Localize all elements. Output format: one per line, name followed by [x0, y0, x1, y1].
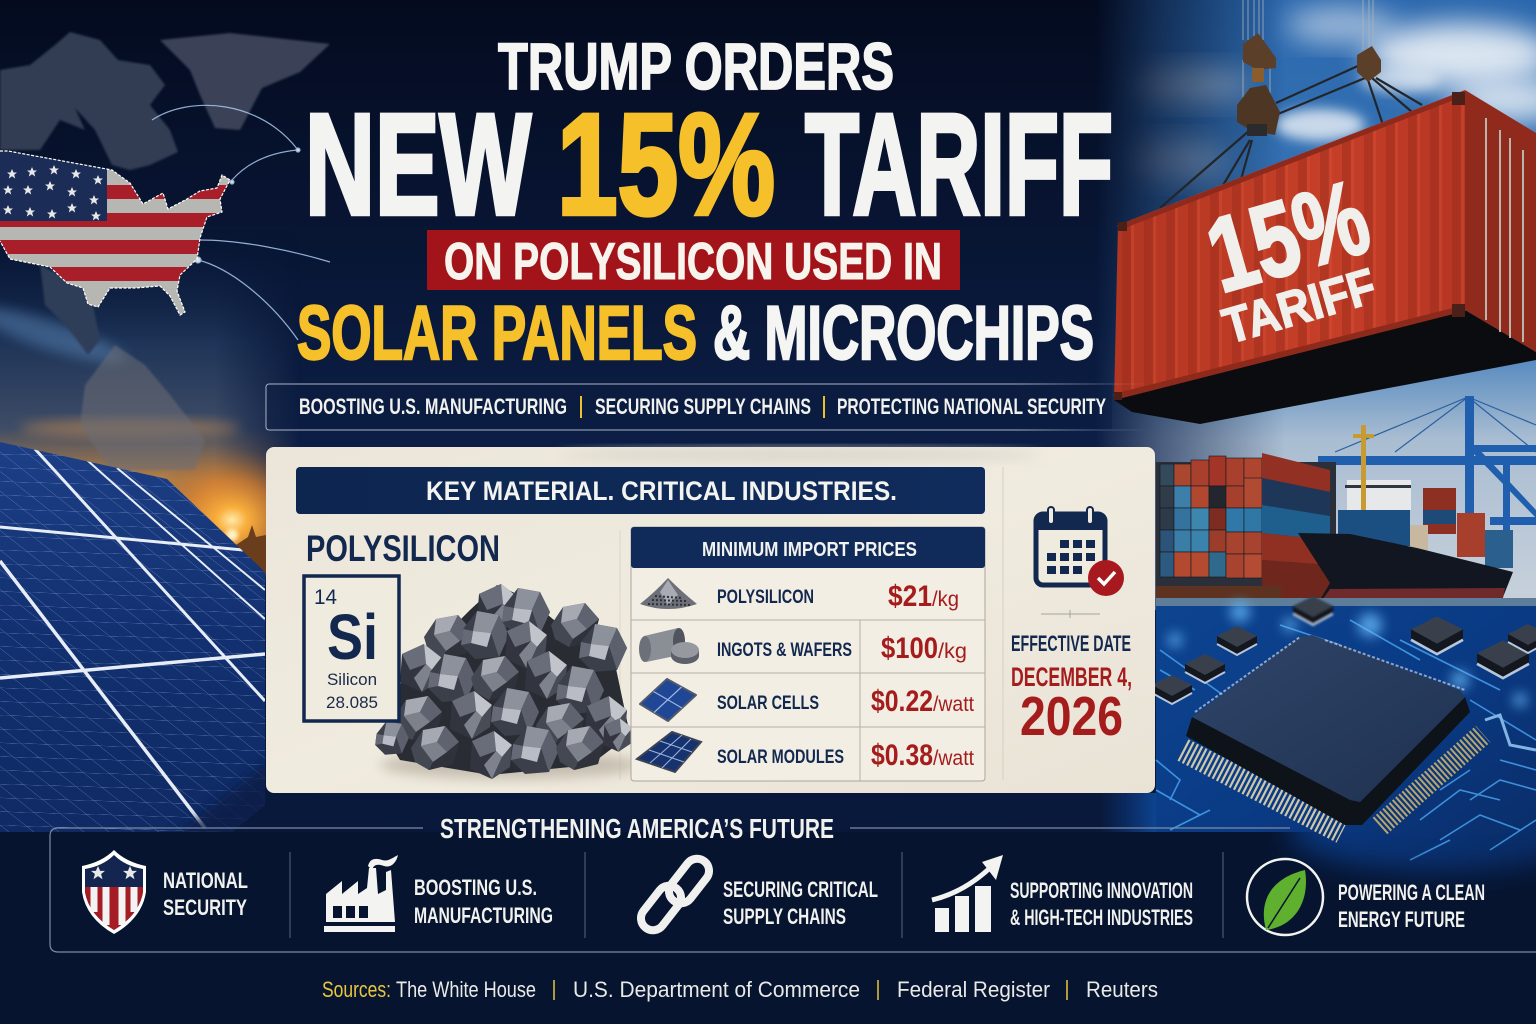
icon: powder pile: [640, 578, 697, 609]
headline line 2: [305, 84, 1113, 245]
effective date: DECEMBER 4,: [1011, 662, 1132, 692]
container front: [1114, 90, 1465, 400]
sources line: Reuters: [1086, 977, 1158, 1002]
container label: 15% tariff: 15%: [1195, 159, 1381, 315]
bottom dark band: [0, 832, 1536, 934]
effective date: 2026: [1020, 685, 1123, 747]
item: national security: SECURITY: [163, 895, 247, 920]
item: clean energy: [1247, 859, 1485, 935]
icon: solar module: [637, 732, 701, 772]
row: ingots and wafers: INGOTS & WAFERS: [717, 640, 852, 661]
item: securing supply chains: SECURING CRITICAL: [723, 877, 878, 902]
item: boosting manufacturing: [324, 855, 553, 932]
row: solar cells: $0.22: [871, 685, 933, 718]
row: solar cells: SOLAR CELLS: [717, 693, 819, 714]
minimum import prices table: [631, 527, 985, 781]
container stacks: [1156, 453, 1336, 602]
item: supporting innovation: & HIGH-TECH INDUSTRIES: [1010, 905, 1193, 930]
item: supporting innovation: [932, 855, 1193, 932]
headline line 2: TARIFF: [805, 84, 1113, 245]
panel: key material card: [266, 447, 1155, 793]
item: clean energy: ENERGY FUTURE: [1338, 907, 1465, 932]
tagline bar: PROTECTING NATIONAL SECURITY: [837, 394, 1106, 419]
item: supporting innovation: SUPPORTING INNOVATION: [1010, 878, 1193, 903]
table heading: [631, 527, 985, 568]
row: ingots and wafers: [639, 628, 967, 665]
sources line: [322, 977, 1158, 1002]
map of USA with flag: [0, 150, 240, 320]
item: boosting manufacturing: MANUFACTURING: [414, 903, 553, 928]
effective date: EFFECTIVE DATE: [1011, 631, 1131, 656]
polysilicon heading: POLYSILICON: [306, 528, 500, 569]
periodic table tile: Si: [327, 601, 378, 673]
sources line: U.S. Department of Commerce: [573, 977, 860, 1002]
headline line 1: TRUMP ORDERS: [498, 29, 894, 103]
shipping container hanging from crane: [1114, 0, 1536, 424]
sunset sky: [0, 284, 292, 583]
solar panels: [0, 440, 280, 840]
headline line 4: SOLAR PANELS: [297, 291, 697, 376]
row: solar modules: /watt: [933, 747, 974, 770]
table heading: MINIMUM IMPORT PRICES: [702, 539, 917, 561]
effective date: [1011, 631, 1132, 747]
row: polysilicon: [640, 578, 959, 613]
icon: factory: [324, 855, 398, 932]
container label: 15% tariff: [1195, 159, 1382, 355]
network arcs: [152, 105, 330, 340]
icon: growth chart with arrow: [932, 855, 1003, 932]
icon: chain link: [636, 854, 714, 935]
row: solar modules: $0.38: [871, 739, 933, 772]
sky with clouds: [1090, 0, 1536, 610]
microchip: [1183, 635, 1483, 832]
cranes: [1318, 396, 1536, 565]
card heading: KEY MATERIAL. CRITICAL INDUSTRIES.: [426, 476, 897, 506]
row: polysilicon: /kg: [932, 588, 959, 611]
row: polysilicon: POLYSILICON: [717, 587, 814, 608]
panel heading: STRENGTHENING AMERICA’S FUTURE: [440, 813, 834, 844]
right scene: sky, port and circuit board: [1090, 0, 1536, 906]
sun and distant skyline: [226, 525, 266, 575]
tagline bar: SECURING SUPPLY CHAINS: [595, 394, 811, 419]
container label: 15% tariff: TARIFF: [1217, 258, 1382, 355]
row: ingots and wafers: /kg: [938, 640, 967, 663]
item: securing supply chains: [636, 854, 878, 935]
row: polysilicon: $21: [888, 580, 932, 613]
left scene: world map, US flag, sunset and solar panels: [0, 32, 330, 840]
headline line 2: 15%: [557, 84, 775, 245]
row: solar modules: [637, 732, 974, 772]
headline line 4: & MICROCHIPS: [713, 291, 1094, 376]
panel: strengthening America's future: [50, 813, 1536, 952]
sources line: Federal Register: [897, 977, 1050, 1002]
icon: ingot and wafer: [639, 628, 699, 664]
container side doors: [1465, 90, 1536, 352]
row: solar modules: SOLAR MODULES: [717, 747, 844, 768]
sources line: The White House: [396, 977, 536, 1002]
headline: [297, 29, 1113, 376]
periodic table tile: 28.085: [326, 693, 378, 712]
item: national security: [82, 850, 248, 934]
periodic table tile: Silicon: [327, 670, 377, 689]
card heading: [296, 467, 985, 514]
tagline bar: [266, 384, 1150, 430]
sources line: Sources:: [322, 977, 391, 1002]
container underside: [1114, 310, 1536, 424]
tagline bar: BOOSTING U.S. MANUFACTURING: [299, 394, 567, 419]
water: [1156, 598, 1536, 612]
circuit board: [1100, 596, 1536, 906]
polysilicon rock pile: [375, 584, 640, 779]
item: securing supply chains: SUPPLY CHAINS: [723, 904, 846, 929]
world map silhouette: [0, 32, 330, 470]
row: ingots and wafers: $100: [881, 632, 938, 665]
red banner: ON POLYSILICON USED IN: [444, 233, 942, 291]
icon: leaf: [1247, 859, 1323, 935]
row: solar cells: [640, 679, 974, 721]
icon: solar cell: [640, 679, 696, 721]
item: boosting manufacturing: BOOSTING U.S.: [414, 875, 537, 900]
container ship: [1298, 425, 1513, 600]
item: national security: NATIONAL: [163, 868, 248, 893]
headline line 2: NEW: [305, 84, 531, 245]
row: solar cells: /watt: [933, 693, 974, 716]
icon: shield: [82, 850, 146, 934]
periodic table tile: 14: [314, 586, 337, 609]
icon: calendar: [1036, 507, 1124, 596]
periodic table tile: [304, 576, 399, 721]
crane rigging: [1160, 0, 1422, 208]
